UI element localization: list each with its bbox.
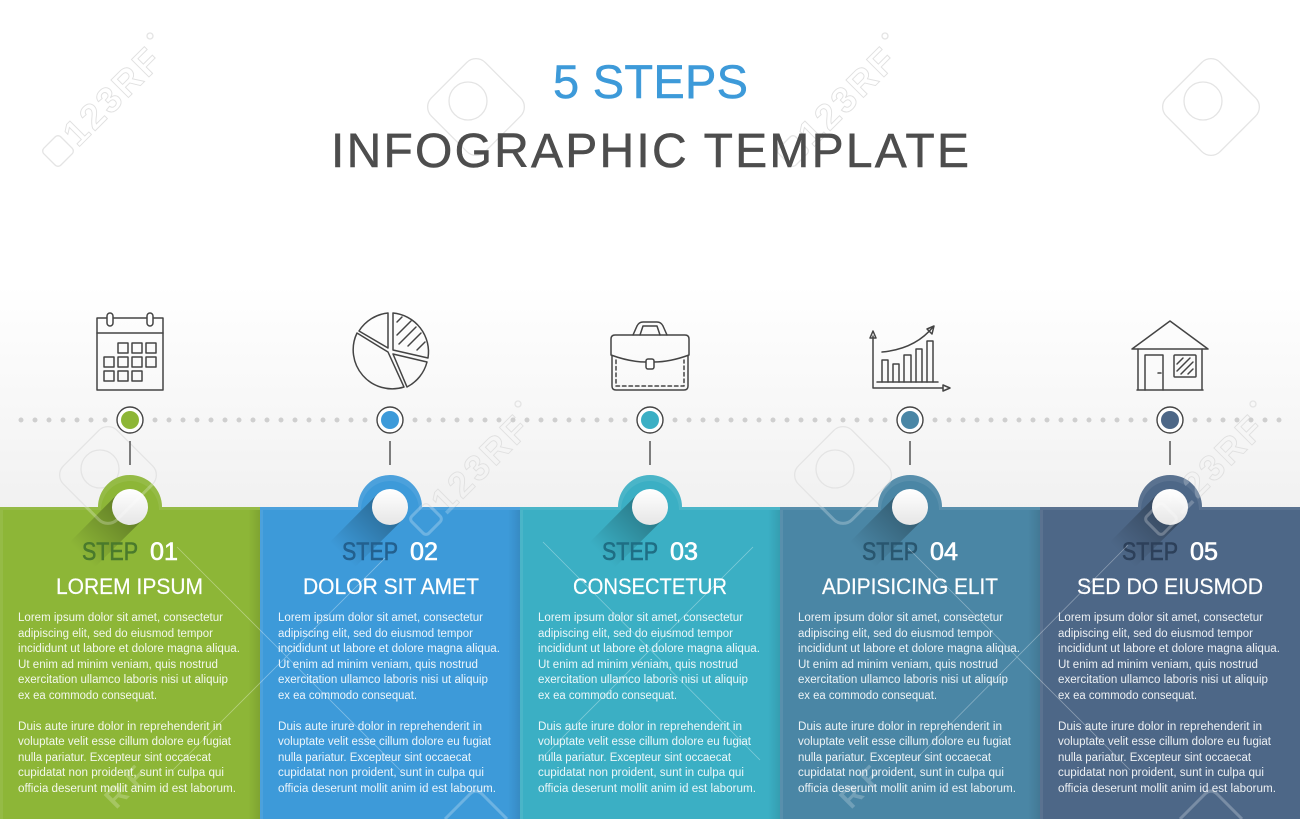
watermarks on white area: 123RF — [423, 408, 537, 522]
body text: ex ea commodo consequat. — [278, 690, 417, 702]
body text: Ut enim ad minim veniam, quis nostrud — [278, 659, 478, 671]
icon: house — [1132, 321, 1208, 390]
body text: incididunt ut labore et dolore magna aliqua. — [538, 643, 760, 655]
body text: Lorem ipsum dolor sit amet, consectetur — [798, 612, 1003, 624]
panel: step 2 — [260, 407, 520, 819]
body text: cupidatat non proident, sunt in culpa qui — [1058, 767, 1264, 779]
icon: growth chart — [870, 326, 950, 391]
dotted timeline — [21, 418, 1280, 422]
body text: officia deserunt mollit anim id est laborum. — [798, 783, 1016, 795]
watermark overlay on panels: RF — [98, 760, 153, 814]
long shadow — [1119, 494, 1182, 557]
body text: nulla pariatur. Excepteur sint occaecat — [798, 752, 992, 764]
step label: 01 — [150, 538, 178, 566]
body text: adipiscing elit, sed do eiusmod tempor — [278, 628, 473, 640]
body text: nulla pariatur. Excepteur sint occaecat — [278, 752, 472, 764]
timeline node — [897, 407, 923, 433]
body text: adipiscing elit, sed do eiusmod tempor — [1058, 628, 1253, 640]
body text: ex ea commodo consequat. — [18, 690, 157, 702]
body text: nulla pariatur. Excepteur sint occaecat — [1058, 752, 1252, 764]
step label — [862, 538, 958, 566]
body text: officia deserunt mollit anim id est laborum. — [278, 783, 496, 795]
body text: Lorem ipsum dolor sit amet, consectetur — [1058, 612, 1263, 624]
long shadow — [596, 494, 662, 560]
body text: Ut enim ad minim veniam, quis nostrud — [798, 659, 998, 671]
step label — [602, 538, 698, 566]
body text: adipiscing elit, sed do eiusmod tempor — [538, 628, 733, 640]
body text: exercitation ullamco laboris nisi ut aliquip — [278, 674, 488, 686]
connector — [389, 441, 391, 465]
body text: cupidatat non proident, sunt in culpa qui — [538, 767, 744, 779]
step label — [342, 538, 438, 566]
icon: briefcase — [611, 322, 689, 390]
panel shape — [1040, 475, 1300, 819]
step label — [82, 538, 178, 566]
timeline node — [117, 407, 143, 433]
body text: officia deserunt mollit anim id est laborum. — [538, 783, 756, 795]
long shadow — [77, 494, 142, 560]
body text: Lorem ipsum dolor sit amet, consectetur — [278, 612, 483, 624]
watermark overlay on panels — [84, 478, 1243, 819]
body text: voluptate velit esse cillum dolore eu fugiat — [1058, 736, 1272, 748]
watermark overlay on panels: RF — [833, 760, 888, 814]
body text: cupidatat non proident, sunt in culpa qui — [18, 767, 224, 779]
step label: STEP — [1122, 538, 1178, 566]
step label: 03 — [670, 538, 698, 566]
connector — [1169, 441, 1171, 465]
white ball — [1152, 489, 1188, 525]
white ball — [372, 489, 408, 525]
body text: voluptate velit esse cillum dolore eu fugiat — [18, 736, 232, 748]
white ball — [892, 489, 928, 525]
panel: step 3 — [520, 407, 780, 819]
timeline node — [637, 407, 663, 433]
step label — [1122, 538, 1218, 566]
panel: step 5 — [1040, 407, 1300, 819]
body text: Lorem ipsum dolor sit amet, consectetur — [538, 612, 743, 624]
step heading: CONSECTETUR — [573, 574, 727, 599]
step heading: DOLOR SIT AMET — [303, 574, 479, 599]
body text: exercitation ullamco laboris nisi ut aliquip — [18, 674, 228, 686]
long shadow — [858, 494, 922, 558]
step label: STEP — [342, 538, 398, 566]
white ball — [112, 489, 148, 525]
body text — [18, 612, 240, 795]
body text: exercitation ullamco laboris nisi ut aliquip — [1058, 674, 1268, 686]
panel: step 1 — [0, 407, 260, 819]
body text — [538, 612, 760, 795]
step heading: ADIPISICING ELIT — [822, 574, 998, 599]
watermark overlay on panels: 123RF — [423, 408, 537, 522]
body text: Duis aute irure dolor in reprehenderit in — [18, 721, 222, 733]
body text: exercitation ullamco laboris nisi ut aliquip — [798, 674, 1008, 686]
body text: voluptate velit esse cillum dolore eu fugiat — [278, 736, 492, 748]
title — [331, 55, 969, 178]
body text: cupidatat non proident, sunt in culpa qui — [798, 767, 1004, 779]
body text — [278, 612, 500, 795]
step label: STEP — [602, 538, 658, 566]
icon: pie chart — [353, 313, 428, 389]
body text: Duis aute irure dolor in reprehenderit in — [1058, 721, 1262, 733]
connector — [129, 441, 131, 465]
connector — [649, 441, 651, 465]
step label: 05 — [1190, 538, 1218, 566]
body text: Lorem ipsum dolor sit amet, consectetur — [18, 612, 223, 624]
panel: step 4 — [780, 407, 1040, 819]
body text: incididunt ut labore et dolore magna aliqua. — [798, 643, 1020, 655]
body text: ex ea commodo consequat. — [538, 690, 677, 702]
watermark lines on panels — [173, 542, 1130, 770]
body text: voluptate velit esse cillum dolore eu fugiat — [798, 736, 1012, 748]
body text: nulla pariatur. Excepteur sint occaecat — [538, 752, 732, 764]
step label: 02 — [410, 538, 438, 566]
title line 2: INFOGRAPHIC TEMPLATE — [331, 125, 969, 178]
body text: adipiscing elit, sed do eiusmod tempor — [18, 628, 213, 640]
body text: Ut enim ad minim veniam, quis nostrud — [1058, 659, 1258, 671]
step heading: LOREM IPSUM — [56, 574, 203, 599]
body text: incididunt ut labore et dolore magna aliqua. — [1058, 643, 1280, 655]
long shadow — [336, 494, 402, 562]
panel shape — [260, 475, 520, 819]
panel shape — [520, 475, 780, 819]
body text: Duis aute irure dolor in reprehenderit in — [278, 721, 482, 733]
body text: officia deserunt mollit anim id est laborum. — [1058, 783, 1276, 795]
panel shape — [780, 475, 1040, 819]
step label: 04 — [930, 538, 958, 566]
body text: ex ea commodo consequat. — [798, 690, 937, 702]
timeline node — [377, 407, 403, 433]
step label: STEP — [82, 538, 138, 566]
icon: calendar — [97, 313, 163, 390]
body text: voluptate velit esse cillum dolore eu fugiat — [538, 736, 752, 748]
white ball — [632, 489, 668, 525]
body text: Ut enim ad minim veniam, quis nostrud — [538, 659, 738, 671]
step label: STEP — [862, 538, 918, 566]
watermarks on white area — [41, 33, 1272, 536]
watermarks on white area: 123RF — [1158, 408, 1272, 522]
body text: incididunt ut labore et dolore magna aliqua. — [278, 643, 500, 655]
watermarks on white area: 123RF — [55, 40, 169, 154]
body text: officia deserunt mollit anim id est laborum. — [18, 783, 236, 795]
body text: Ut enim ad minim veniam, quis nostrud — [18, 659, 218, 671]
body text: nulla pariatur. Excepteur sint occaecat — [18, 752, 212, 764]
body text: Duis aute irure dolor in reprehenderit in — [798, 721, 1002, 733]
body text: ex ea commodo consequat. — [1058, 690, 1197, 702]
body text: incididunt ut labore et dolore magna aliqua. — [18, 643, 240, 655]
title line 1: 5 STEPS — [553, 55, 748, 108]
body text — [1058, 612, 1280, 795]
body text: Duis aute irure dolor in reprehenderit in — [538, 721, 742, 733]
connector — [909, 441, 911, 465]
timeline node — [1157, 407, 1183, 433]
body text: cupidatat non proident, sunt in culpa qui — [278, 767, 484, 779]
panel shape — [0, 475, 260, 819]
watermarks on white area: 123RF — [790, 40, 904, 154]
watermark overlay on panels: 123RF — [1158, 408, 1272, 522]
step heading: SED DO EIUSMOD — [1077, 574, 1263, 599]
body text: exercitation ullamco laboris nisi ut aliquip — [538, 674, 748, 686]
body text — [798, 612, 1020, 795]
body text: adipiscing elit, sed do eiusmod tempor — [798, 628, 993, 640]
